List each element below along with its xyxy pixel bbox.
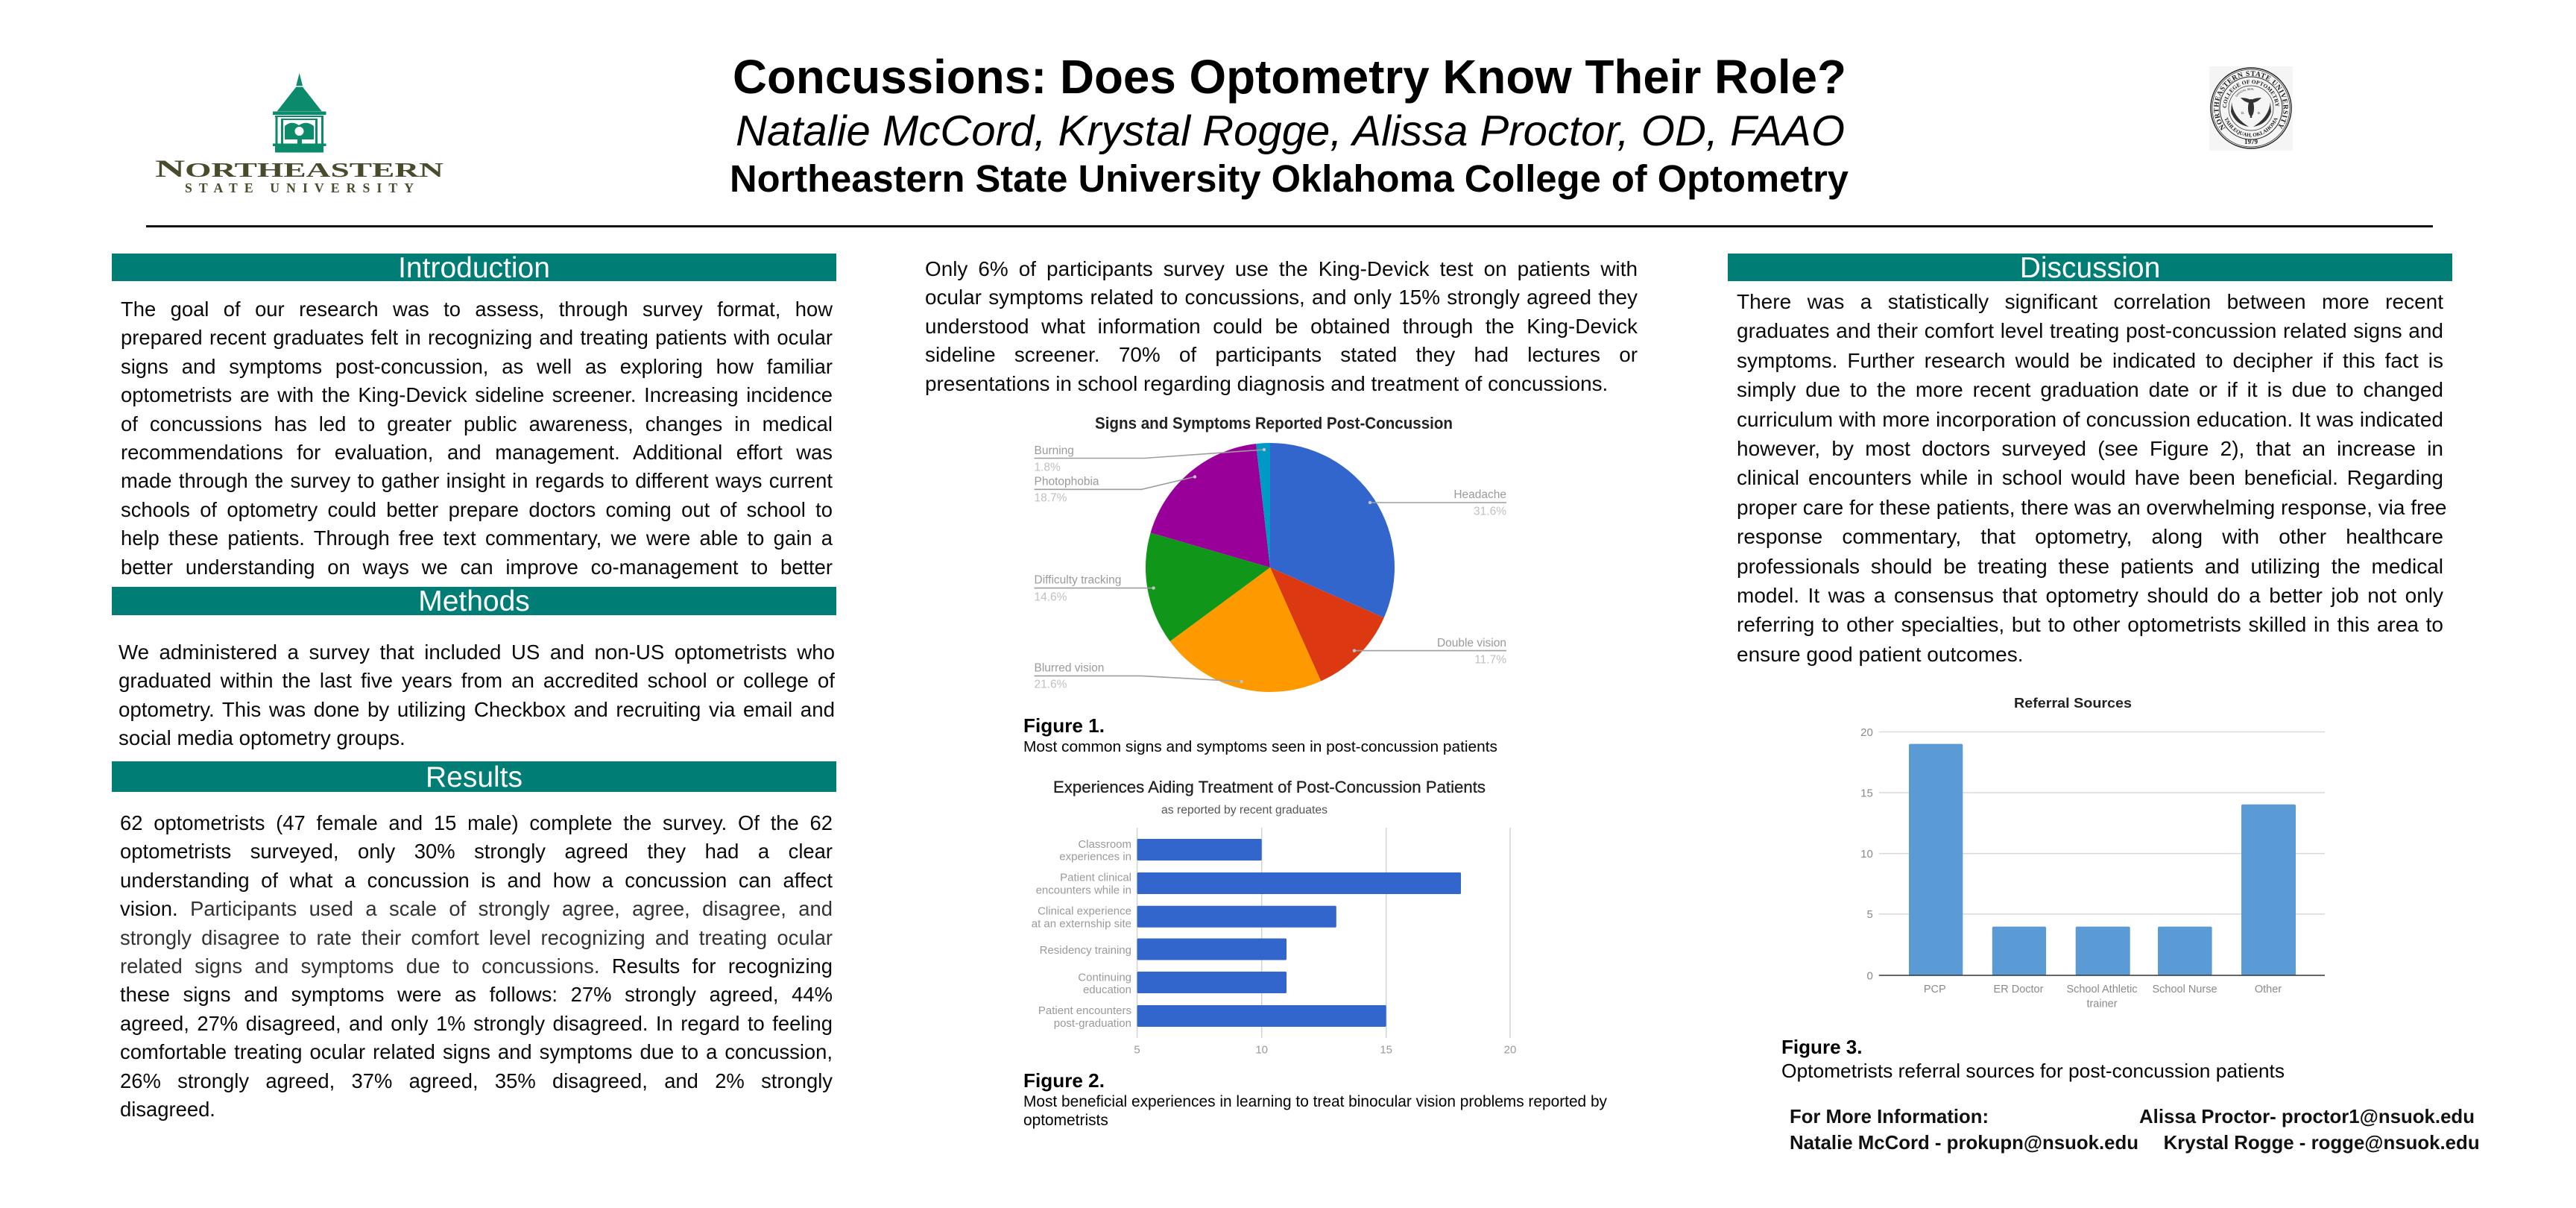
text block: results: 26% strongly agreed, 37% agreed, 35% disagreed, and 2% strongly (120, 1069, 833, 1092)
axis labels: 20 (1504, 1044, 1516, 1056)
text block: methods (119, 641, 835, 749)
text block: results: related signs and symptoms due to concussions. Results for recognizing (120, 954, 833, 978)
panel: figure 2 bar chart (1023, 778, 1608, 1129)
text block: results: these signs and symptoms were as follows: 27% strongly agreed, 44% (120, 983, 833, 1006)
figure 2 caption (1023, 1069, 1608, 1129)
leader anchor dots (1152, 448, 1371, 683)
text block: middle column summary: sideline screener. 70% of participants stated they had lectures or (925, 343, 1638, 366)
text block: discussion: professionals should be treating these patients and utilizing the medical (1737, 555, 2443, 578)
icon: College of Optometry seal: O. (2241, 111, 2244, 115)
title: Concussions: Does Optometry Know Their Role? (733, 51, 1846, 104)
logo wordmark (155, 156, 444, 195)
text block: results: optometrists surveyed, only 30% strongly agreed they had a clear (120, 840, 833, 863)
chart title: Experiences Aiding Treatment of Post-Concussion Patients (1053, 778, 1486, 796)
text block: discussion: referring to other specialties, but to other optometrists skilled in this area to (1737, 613, 2443, 636)
x axis labels: trainer (2086, 998, 2118, 1010)
x axis labels: PCP (1924, 984, 1946, 995)
text block: introduction: made through the survey to gather insight in regards to different ways current (121, 469, 833, 492)
text block: introduction: The goal of our research was to assess, through survey format, how (121, 298, 833, 321)
heading: Methods: Methods (418, 585, 530, 617)
heading: Methods (112, 587, 836, 615)
logo wordmark: N ORTHEASTERN (155, 156, 444, 183)
slice percentages: 31.6% (1474, 506, 1506, 518)
category labels: Continuing (1078, 971, 1131, 984)
category labels: Classroom (1078, 838, 1131, 851)
icon: College of Optometry seal: 1979 (2244, 138, 2258, 145)
axis labels: 10 (1255, 1044, 1268, 1056)
divider rule (146, 225, 2433, 227)
figure 3 caption (1781, 1036, 2285, 1082)
icon: College of Optometry seal (2209, 66, 2293, 151)
heading: Results (112, 761, 836, 792)
slice percentages: 14.6% (1035, 591, 1067, 604)
contact information (1790, 1107, 2480, 1154)
baseline (1879, 975, 2325, 976)
category labels: Residency training (1040, 944, 1131, 957)
y axis labels: 5 (1866, 908, 1873, 921)
figure 3 caption: Optometrists referral sources for post-concussion patients (1781, 1060, 2285, 1082)
chart title: Signs and Symptoms Reported Post-Concussion (1095, 414, 1453, 432)
figure 1 caption (1023, 714, 1497, 755)
figure 2 caption: Most beneficial experiences in learning to treat binocular vision problems reported by (1023, 1093, 1608, 1110)
panel: figure 3 column chart (1781, 696, 2325, 1082)
text block: discussion: ensure good patient outcomes. (1737, 643, 2023, 666)
text block: middle column summary: understood what information could be obtained through the King-Devick (925, 315, 1638, 338)
contact information: Krystal Rogge - rogge@nsuok.edu (2164, 1133, 2480, 1154)
x axis labels: School Nurse (2152, 984, 2217, 995)
text block: methods: We administered a survey that included US and non-US optometrists who (119, 641, 835, 664)
text block: discussion (1737, 290, 2447, 666)
icon: College of Optometry seal: NORTHEASTERN STATE UNIVERSITY (2214, 71, 2288, 131)
slice percentages: 18.7% (1035, 492, 1067, 504)
slice labels (1035, 444, 1506, 674)
logo: Northeastern State University (155, 73, 444, 195)
category labels: at an externship site (1032, 917, 1131, 931)
text block: introduction: signs and symptoms post-concussion, as well as exploring how familiar (121, 355, 833, 378)
text block: discussion: clinical encounters while in school would have been beneficial. Regarding (1737, 466, 2443, 489)
institution: Northeastern State University Oklahoma College of Optometry (730, 157, 1849, 200)
title block (730, 51, 1849, 200)
slice labels: Photophobia (1035, 476, 1099, 488)
icon: College of Optometry seal: OFFICIAL SEAL (2235, 88, 2254, 97)
text block: introduction: recommendations for evaluation, and management. Additional effort was (121, 441, 833, 464)
category labels: post-graduation (1054, 1017, 1131, 1030)
heading: Introduction: Introduction (398, 252, 550, 284)
chart subtitle: as reported by recent graduates (1161, 804, 1328, 817)
panel: results (112, 761, 836, 1121)
icon: College of Optometry seal: TAHLEQUAH, OKLAHOMA (2224, 117, 2278, 137)
heading: Results: Results (426, 761, 523, 793)
slice percentages: 1.8% (1035, 461, 1061, 474)
gridlines (1137, 828, 1510, 1038)
slice percentages (1035, 461, 1506, 690)
figure 2 caption: Figure 2. (1023, 1069, 1105, 1092)
authors: Natalie McCord, Krystal Rogge, Alissa Proctor, OD, FAAO (736, 107, 1845, 155)
text block: middle column summary: presentations in school regarding diagnosis and treatment of concussions. (925, 372, 1608, 395)
logo wordmark: STATE UNIVERSITY (185, 180, 414, 195)
text block: middle column summary (925, 257, 1638, 395)
text block: discussion: response commentary, that optometry, along with other healthcare (1737, 525, 2443, 548)
bars (1909, 744, 2296, 975)
y axis labels: 20 (1860, 726, 1873, 739)
category labels: Patient encounters (1038, 1004, 1131, 1017)
axis labels (1134, 1044, 1516, 1056)
panel: introduction (112, 252, 836, 579)
category labels: education (1083, 984, 1131, 996)
icon: College of Optometry seal: COLLEGE OF OPTOMETRY (2223, 80, 2279, 107)
text block: discussion: There was a statistically significant correlation between more recent (1737, 290, 2443, 313)
y axis labels (1860, 726, 1873, 983)
gridlines (1879, 732, 2325, 914)
text block: results: comfortable treating ocular related signs and symptoms due to a concussion, (120, 1040, 833, 1063)
figure 1 caption: Figure 1. (1023, 714, 1105, 737)
text block: results (120, 811, 833, 1121)
text block: results: vision. Participants used a scale of strongly agree, agree, disagree, and (120, 897, 833, 920)
text block: discussion: model. It was a consensus that optometry should do a better job not only (1737, 584, 2443, 607)
slice labels: Burning (1035, 444, 1074, 457)
x axis labels: Other (2255, 984, 2282, 995)
text block: middle column summary: Only 6% of participants survey use the King-Devick test on patients with (925, 257, 1638, 280)
text block: discussion: however, by most doctors surveyed (see Figure 2), that an increase in (1737, 437, 2443, 460)
text block: discussion: graduates and their comfort level treating post-concussion related signs and (1737, 319, 2443, 342)
contact information: Natalie McCord - prokupn@nsuok.edu (1790, 1133, 2138, 1154)
text block: introduction: optometrists are with the King-Devick sideline screener. Increasing incidence (121, 383, 833, 406)
text block: introduction: help these patients. Through free text commentary, we were able to gain a (121, 526, 833, 550)
slice labels: Headache (1453, 488, 1506, 501)
text block: results: 62 optometrists (47 female and 15 male) complete the survey. Of the 62 (120, 811, 833, 834)
panel: figure 1 pie chart (1023, 414, 1506, 755)
icon: clock tower (273, 73, 326, 152)
text block: introduction (121, 298, 833, 579)
icon: College of Optometry seal: D. (2258, 111, 2261, 115)
text block: introduction: better understanding on ways we can improve co-management to better (121, 556, 833, 579)
text block: introduction: schools of optometry could better prepare doctors coming out of school to (121, 498, 833, 521)
slice labels: Blurred vision (1035, 662, 1104, 674)
text block: results: agreed, 27% disagreed, and only 1% strongly disagreed. In regard to feeling (120, 1012, 833, 1035)
bars (1137, 839, 1461, 1027)
text block: middle column summary: ocular symptoms related to concussions, and only 15% strongly agreed they (925, 286, 1638, 309)
text block: results: disagreed. (120, 1098, 215, 1121)
y axis labels: 0 (1866, 969, 1873, 983)
header: logos, title and authors (155, 51, 2293, 200)
category labels: Clinical experience (1038, 905, 1131, 917)
text block: methods: graduated within the last five years from an accredited school or college of (119, 669, 835, 692)
slice percentages: 11.7% (1474, 653, 1506, 667)
heading: Discussion (1728, 254, 2452, 281)
heading: Introduction (112, 254, 836, 281)
x axis labels: ER Doctor (1994, 984, 2044, 995)
contact information: Alissa Proctor- proctor1@nsuok.edu (2139, 1107, 2475, 1127)
text block: discussion: curriculum with more incorporation of concussion education. It was indicated (1737, 408, 2443, 431)
text block: results: strongly disagree to rate their comfort level recognizing and treating ocular (120, 926, 833, 949)
panel: methods (112, 585, 836, 749)
figure 1 caption: Most common signs and symptoms seen in post-concussion patients (1023, 738, 1497, 755)
text block: methods: optometry. This was done by utilizing Checkbox and recruiting via email and (119, 698, 835, 721)
pie slices (1146, 443, 1395, 692)
category labels: experiences in (1059, 850, 1131, 863)
text block: introduction: prepared recent graduates felt in recognizing and treating patients with ocular (121, 326, 833, 349)
text block: discussion: proper care for these patients, there was an overwhelming response, via free (1737, 496, 2447, 519)
text block: discussion: symptoms. Further research would be indicated to decipher if this fact is (1737, 349, 2443, 372)
category labels: encounters while in (1036, 884, 1131, 896)
heading: Discussion: Discussion (2020, 252, 2160, 284)
axis labels: 15 (1380, 1044, 1392, 1056)
chart title: Referral Sources (2014, 696, 2132, 711)
leader lines (1035, 450, 1506, 682)
text block: introduction: of concussions has led to greater public awareness, changes in medical (121, 412, 833, 435)
figure 3 caption: Figure 3. (1781, 1036, 1862, 1058)
x axis labels (1924, 984, 2282, 1010)
figure 2 caption: optometrists (1023, 1112, 1108, 1129)
slice percentages: 21.6% (1035, 679, 1067, 690)
x axis labels: School Athletic (2066, 984, 2138, 995)
category labels (1032, 838, 1131, 1030)
text block: discussion: simply due to the more recent graduation date or if it is due to changed (1737, 378, 2443, 401)
y axis labels: 10 (1860, 848, 1873, 861)
slice labels: Double vision (1437, 637, 1506, 649)
contact information: For More Information: (1790, 1107, 1989, 1127)
axis labels: 5 (1134, 1044, 1140, 1056)
category labels: Patient clinical (1060, 871, 1131, 884)
text block: methods: social media optometry groups. (119, 726, 405, 749)
slice labels: Difficulty tracking (1035, 574, 1121, 586)
panel: discussion (1728, 252, 2452, 666)
text block: results: understanding of what a concussion is and how a concussion can affect (120, 869, 833, 892)
y axis labels: 15 (1860, 787, 1873, 799)
